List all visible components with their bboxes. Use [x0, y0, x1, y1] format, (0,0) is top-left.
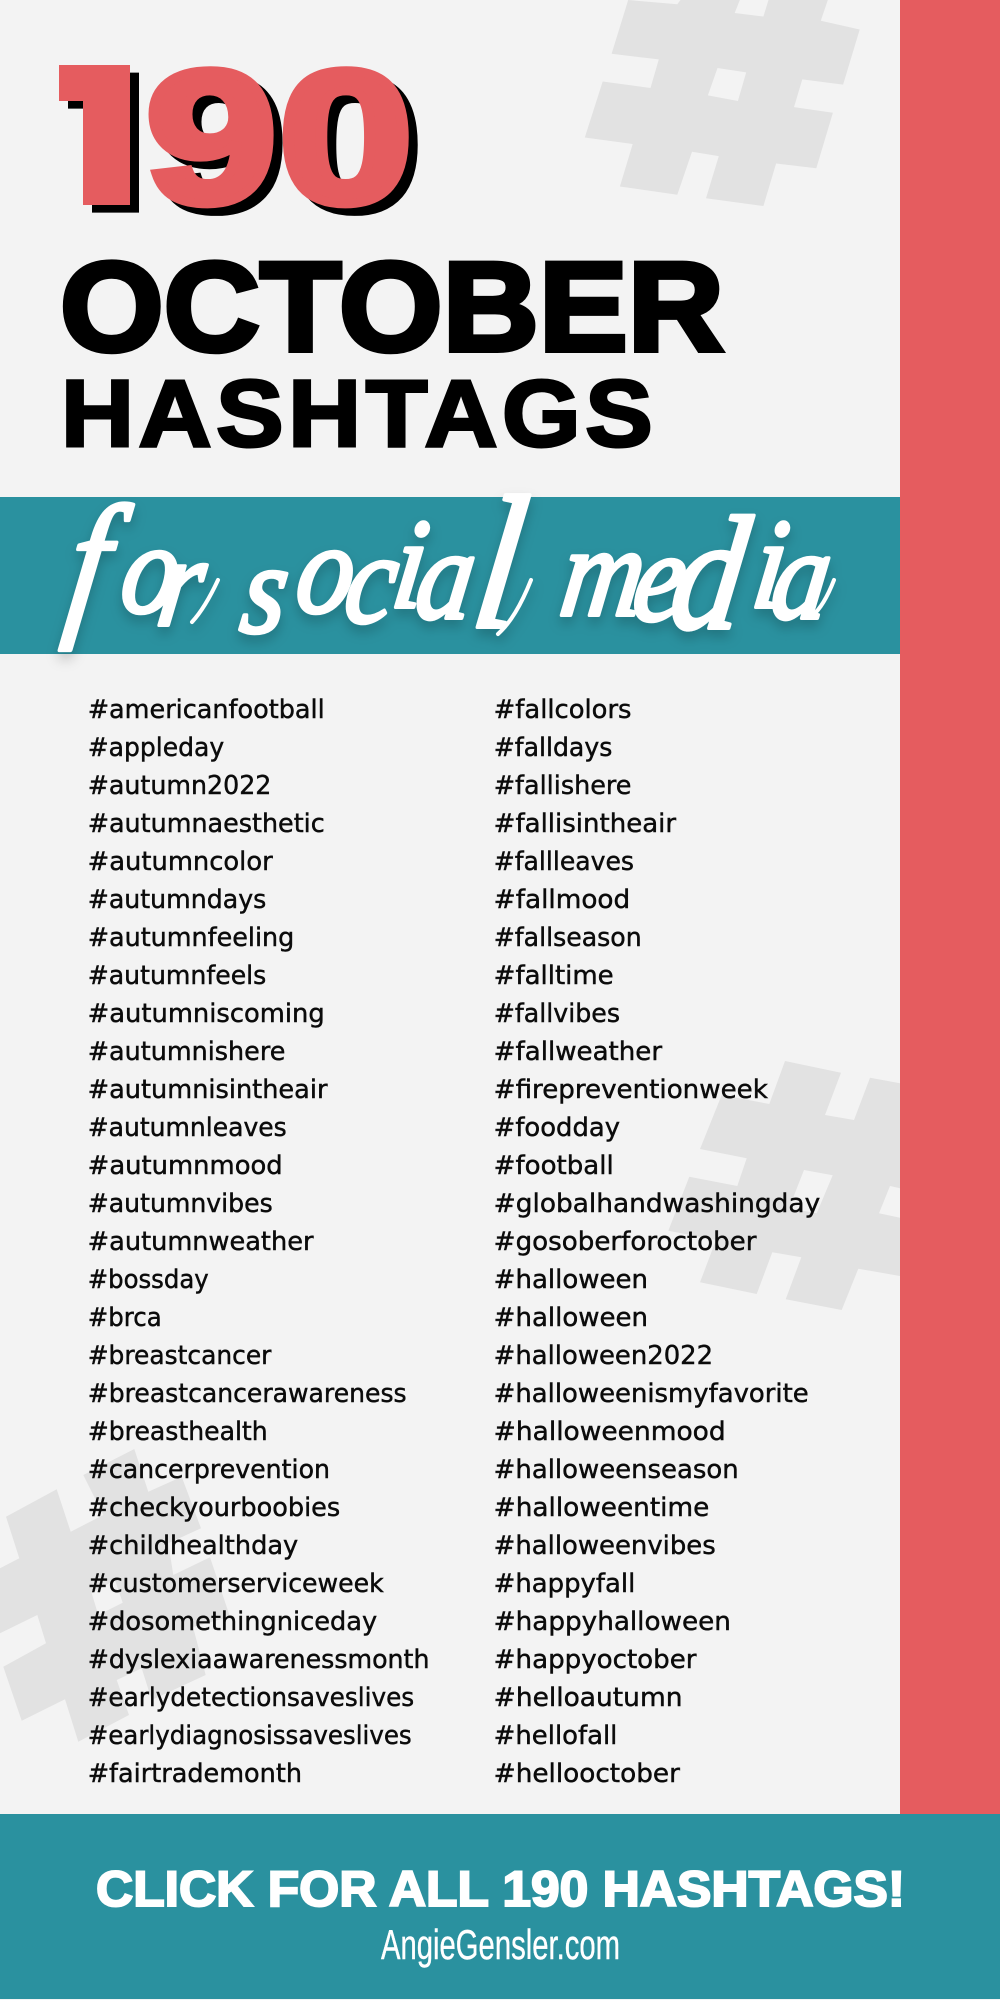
hashtag list column 1: #autumn2022 [88, 771, 271, 801]
hashtag list column 1: #breasthealth [88, 1417, 268, 1447]
number shadow: 0 [288, 40, 422, 250]
number face: 9 [146, 32, 277, 243]
hashtag list column 2: #halloweenseason [494, 1455, 739, 1485]
hashtag list column 1: #autumnvibes [88, 1189, 273, 1219]
hashtag list column 1: #bossday [88, 1265, 209, 1295]
hashtag list column 1: #checkyourboobies [88, 1493, 340, 1523]
hashtag list column 2: #gosoberforoctober [494, 1227, 757, 1257]
hashtag list column 1: #autumnfeeling [88, 923, 294, 953]
hashtag list column 1: #autumncolor [88, 847, 273, 877]
hashtag list column 2: #halloweentime [494, 1493, 709, 1523]
hashtag list column 1: #autumnleaves [88, 1113, 287, 1143]
hashtag list column 1 [88, 695, 429, 1789]
hashtag list column 2: #happyhalloween [494, 1607, 731, 1637]
hashtag list column 1: #autumnfeels [88, 961, 266, 991]
hashtag list column 1: #autumndays [88, 885, 266, 915]
hashtag list column 2: #football [494, 1151, 614, 1181]
footer band [0, 1814, 1000, 1999]
number shadow: 9 [155, 40, 286, 250]
number shadow [68, 40, 422, 250]
title number 190 [59, 65, 418, 216]
hashtag list column 2: #fallleaves [494, 847, 634, 877]
hashtag list column 2 [494, 695, 820, 1789]
hashtag list column 1: #autumnishere [88, 1037, 285, 1067]
script heading: for social media: social [233, 458, 539, 668]
script heading: for social media: for [57, 473, 220, 654]
hashtag list column 1: #dosomethingniceday [88, 1607, 377, 1637]
number face: 1 [40, 33, 155, 243]
hashtag list column 2: #helloautumn [494, 1683, 682, 1713]
hashtag list column 1: #childhealthday [88, 1531, 298, 1561]
right red side bar [900, 0, 1000, 1814]
hashtag list column 1: #autumnweather [88, 1227, 314, 1257]
hashtag list column 2: #happyoctober [494, 1645, 697, 1675]
hashtag list column 2: #globalhandwashingday [494, 1189, 820, 1219]
number face: 0 [279, 32, 413, 242]
teal banner [0, 497, 900, 654]
footer call to action: CLICK FOR ALL 190 HASHTAGS! [96, 1861, 905, 1917]
decorative hashtag middle right [668, 1061, 900, 1310]
hashtag list column 1: #brca [88, 1303, 162, 1333]
footer website: AngieGensler.com [381, 1921, 620, 1968]
hashtag list column 2: #fallcolors [494, 695, 632, 725]
hashtag list column 2: #falltime [494, 961, 614, 991]
hashtag list column 1: #breastcancerawareness [88, 1379, 407, 1409]
number face [59, 65, 409, 208]
hashtag list column 1: #autumnmood [88, 1151, 283, 1181]
script heading: for social media [57, 458, 843, 668]
hashtag list column 2: #falldays [494, 733, 612, 763]
hashtag list column 2: #fallisintheair [494, 809, 677, 839]
hashtag list column 1: #cancerprevention [88, 1455, 330, 1485]
hashtag list column 2: #hellofall [494, 1721, 617, 1751]
hashtag list column 1: #earlydiagnosissaveslives [88, 1721, 412, 1751]
hashtag list column 2: #halloween [494, 1265, 648, 1295]
decorative hashtag top right [585, 0, 860, 206]
hashtag list column 2: #halloween [494, 1303, 648, 1333]
hashtag list column 1: #earlydetectionsaveslives [88, 1683, 414, 1713]
hashtag list column 2: #fallvibes [494, 999, 620, 1029]
hashtag list column 2: #fallmood [494, 885, 630, 915]
hashtag list column 2: #fallweather [494, 1037, 663, 1067]
hashtag list column 1: #autumniscoming [88, 999, 325, 1029]
hashtag list column 2: #halloweenismyfavorite [494, 1379, 809, 1409]
title word HASHTAGS: HASHTAGS [61, 360, 653, 466]
hashtag list column 1: #autumnisintheair [88, 1075, 328, 1105]
hashtag list column 1: #customerserviceweek [88, 1569, 384, 1599]
title word OCTOBER: OCTOBER [60, 236, 724, 378]
hashtag list column 1: #autumnaesthetic [88, 809, 325, 839]
hashtag list column 2: #firepreventionweek [494, 1075, 768, 1105]
hashtag list column 2: #foodday [494, 1113, 620, 1143]
decorative hashtag lower left [0, 1449, 230, 1742]
hashtag list column 2: #halloweenmood [494, 1417, 726, 1447]
hashtag list column 2: #halloween2022 [494, 1341, 713, 1371]
hashtag list column 2: #happyfall [494, 1569, 635, 1599]
hashtag list column 2: #halloweenvibes [494, 1531, 716, 1561]
hashtag list column 2: #fallishere [494, 771, 632, 801]
hashtag list column 1: #americanfootball [88, 695, 325, 725]
hashtag list column 1: #breastcancer [88, 1341, 272, 1371]
hashtag list column 2: #fallseason [494, 923, 642, 953]
hashtag list column 2: #hellooctober [494, 1759, 680, 1789]
hashtag list column 1: #fairtrademonth [88, 1759, 302, 1789]
hashtag list column 1: #appleday [88, 733, 224, 763]
hashtag list column 1: #dyslexiaawarenessmonth [88, 1645, 429, 1675]
script heading: for social media: media [551, 484, 843, 664]
